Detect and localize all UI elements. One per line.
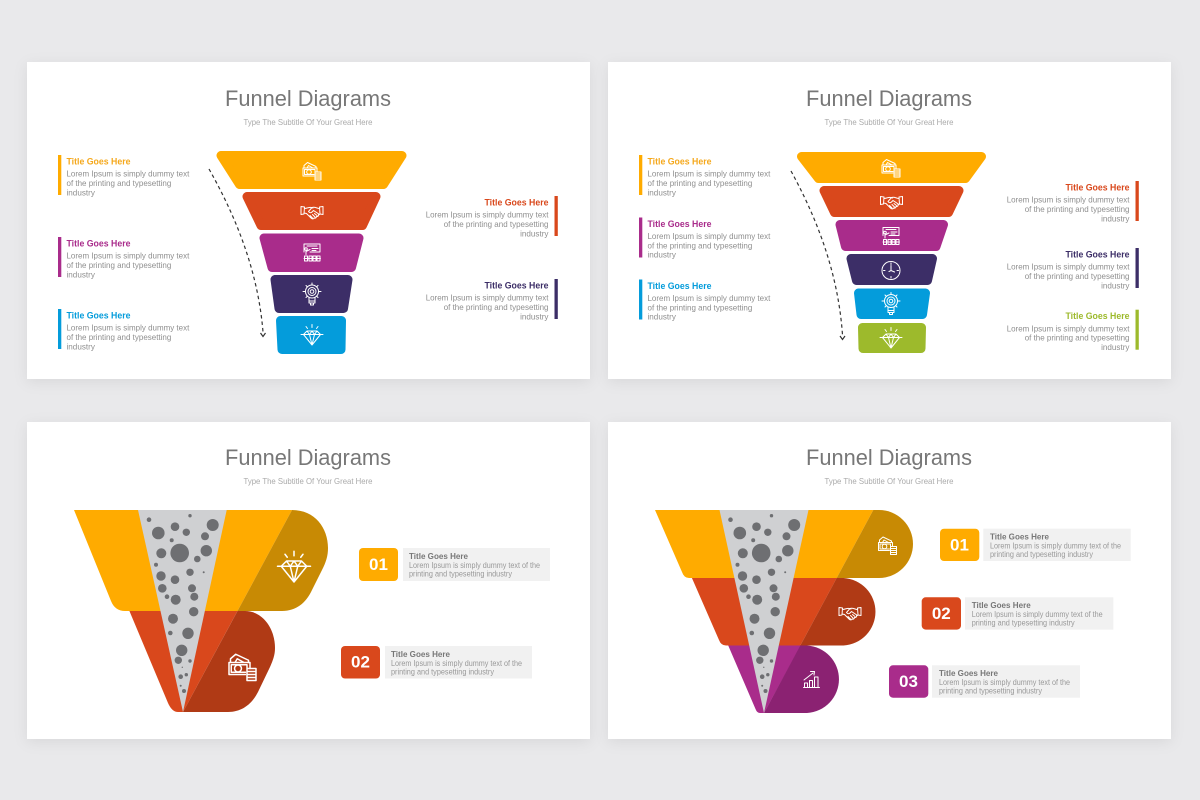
title: Funnel Diagrams <box>806 86 972 111</box>
funnel band: yellow <box>655 510 873 578</box>
icon: billboard <box>883 228 900 244</box>
subtitle: Type The Subtitle Of Your Great Here <box>824 476 954 486</box>
text block 1: industry <box>66 187 96 197</box>
text block 4 <box>426 279 558 321</box>
text block 3: Title Goes Here <box>648 219 712 229</box>
callout 02: 02 <box>932 604 951 623</box>
icon: money <box>882 160 900 177</box>
text block 5: industry <box>66 341 96 351</box>
funnel band: yellow <box>74 510 292 611</box>
icon: money <box>878 537 896 554</box>
text block 3: of the printing and typesetting <box>648 240 753 250</box>
icon: money <box>229 654 256 680</box>
text block 4: Lorem Ipsum is simply dummy text <box>1007 262 1130 272</box>
callout 02 <box>922 597 1113 630</box>
text block 2: of the printing and typesetting <box>1025 204 1130 214</box>
text block 1 <box>639 155 771 197</box>
text block 5: Lorem Ipsum is simply dummy text <box>66 323 190 333</box>
icon: handshake <box>301 206 323 219</box>
arrow: dashed flow <box>791 171 845 340</box>
text block 6 <box>1007 310 1139 352</box>
icon: chart <box>804 672 820 688</box>
panel: six-step funnel <box>608 62 1171 379</box>
icon: bulb <box>882 292 900 314</box>
text block 4: of the printing and typesetting <box>444 302 549 312</box>
text block 2 <box>1007 181 1139 223</box>
title: Funnel Diagrams <box>225 86 391 111</box>
funnel layer 4 <box>851 258 932 280</box>
callout 03: 03 <box>899 672 918 691</box>
callout 01: Lorem Ipsum is simply dummy text of the <box>990 541 1121 550</box>
text block 6: of the printing and typesetting <box>1025 333 1130 343</box>
text block 5: industry <box>648 312 677 322</box>
callout 02: Title Goes Here <box>391 649 450 659</box>
subtitle: Type The Subtitle Of Your Great Here <box>244 117 373 127</box>
panel: five-step funnel <box>27 62 590 379</box>
subtitle: Type The Subtitle Of Your Great Here <box>824 117 954 127</box>
text block 3 <box>639 218 771 260</box>
funnel layer 2 <box>824 190 959 212</box>
panel: two-step wedge funnel <box>27 422 590 739</box>
text block 4: Title Goes Here <box>1066 249 1130 259</box>
funnel layer 4 <box>275 280 348 308</box>
funnel layer 5 <box>858 293 926 314</box>
funnel band: red <box>129 610 238 712</box>
text block 3: of the printing and typesetting <box>66 260 172 270</box>
callout 03 <box>889 665 1080 698</box>
text block 2: Lorem Ipsum is simply dummy text <box>1007 195 1130 205</box>
callout 01: 01 <box>369 555 388 574</box>
text block 4: Title Goes Here <box>484 280 548 290</box>
funnel band: purple <box>728 645 801 713</box>
text block 3 <box>58 237 190 279</box>
text block 2: of the printing and typesetting <box>444 219 549 229</box>
text block 1: Title Goes Here <box>66 157 130 167</box>
text block 3: Lorem Ipsum is simply dummy text <box>66 251 190 261</box>
text block 5 <box>58 309 190 351</box>
funnel band: red <box>692 578 837 646</box>
callout 03: Lorem Ipsum is simply dummy text of the <box>939 678 1070 687</box>
icon: diamond <box>301 324 323 345</box>
panel: three-step wedge funnel <box>608 422 1171 739</box>
callout 02: Lorem Ipsum is simply dummy text of the <box>972 610 1103 619</box>
callout 02: Title Goes Here <box>972 600 1031 610</box>
text block 1: industry <box>648 187 677 197</box>
funnel layer 2 <box>247 196 376 226</box>
callout 01: printing and typesetting industry <box>409 570 512 578</box>
text block 1: Lorem Ipsum is simply dummy text <box>66 169 190 179</box>
funnel tab: dark red <box>800 578 875 646</box>
grey wedge with dots <box>138 510 227 712</box>
funnel layer 3 <box>264 238 359 268</box>
funnel tab: dark purple <box>764 646 839 713</box>
text block 2: industry <box>520 228 549 238</box>
callout 02: printing and typesetting industry <box>391 668 494 676</box>
icon: bulb <box>303 283 321 305</box>
icon: handshake <box>880 196 902 209</box>
text block 5: Lorem Ipsum is simply dummy text <box>648 293 771 303</box>
text block 4: industry <box>520 311 549 321</box>
text block 5: Title Goes Here <box>66 311 130 321</box>
text block 1: Title Goes Here <box>648 157 712 167</box>
text block 5 <box>639 280 771 322</box>
callout 01: Title Goes Here <box>409 551 468 561</box>
funnel layer 1 <box>221 156 402 184</box>
callout 01: 01 <box>950 536 969 554</box>
text block 2: Title Goes Here <box>1066 182 1130 192</box>
callout 01: Lorem Ipsum is simply dummy text of the <box>409 561 540 570</box>
funnel tab: dark yellow <box>837 510 913 578</box>
text block 4 <box>1007 248 1139 290</box>
text block 6: industry <box>1101 342 1130 352</box>
arrow: dashed flow <box>209 169 266 336</box>
icon: diamond <box>880 328 902 348</box>
text block 3: Lorem Ipsum is simply dummy text <box>648 231 771 241</box>
text block 6: Lorem Ipsum is simply dummy text <box>1007 323 1130 333</box>
callout 02: printing and typesetting industry <box>972 618 1075 627</box>
text block 4: industry <box>1101 280 1130 290</box>
text block 5: Title Goes Here <box>648 281 712 291</box>
funnel layer 1 <box>802 156 982 178</box>
text block 1: of the printing and typesetting <box>648 178 753 188</box>
text block 1: of the printing and typesetting <box>66 178 172 188</box>
text block 4: of the printing and typesetting <box>1025 271 1130 281</box>
subtitle: Type The Subtitle Of Your Great Here <box>244 476 373 486</box>
funnel tab: dark yellow <box>238 510 328 611</box>
title: Funnel Diagrams <box>806 445 972 470</box>
callout 02 <box>341 646 532 678</box>
text block 3: industry <box>66 269 96 279</box>
callout 03: printing and typesetting industry <box>939 686 1042 696</box>
text block 1 <box>58 155 190 197</box>
text block 3: Title Goes Here <box>66 239 130 249</box>
title: Funnel Diagrams <box>225 445 391 470</box>
text block 6: Title Goes Here <box>1066 311 1130 321</box>
icon: handshake <box>839 608 861 620</box>
funnel layer 6 <box>862 328 922 348</box>
funnel layer 3 <box>840 224 944 246</box>
icon: diamond <box>278 551 310 582</box>
text block 5: of the printing and typesetting <box>66 332 172 342</box>
text block 4: Lorem Ipsum is simply dummy text <box>426 293 549 303</box>
funnel layer 5 <box>280 320 342 350</box>
text block 2 <box>426 196 558 238</box>
callout 01 <box>940 529 1131 561</box>
callout 03: Title Goes Here <box>939 668 998 678</box>
text block 2: industry <box>1101 213 1130 223</box>
text block 3: industry <box>648 250 677 260</box>
icon: billboard <box>304 244 320 261</box>
callout 01: printing and typesetting industry <box>990 550 1093 559</box>
grey wedge with dots <box>720 510 808 713</box>
callout 02: Lorem Ipsum is simply dummy text of the <box>391 659 522 668</box>
icon: clock <box>882 262 900 280</box>
callout 02: 02 <box>351 652 370 672</box>
text block 5: of the printing and typesetting <box>648 302 753 312</box>
icon: money <box>303 162 321 180</box>
text block 2: Lorem Ipsum is simply dummy text <box>426 210 549 220</box>
text block 2: Title Goes Here <box>484 197 548 207</box>
callout 01: Title Goes Here <box>990 532 1049 542</box>
text block 1: Lorem Ipsum is simply dummy text <box>648 169 771 179</box>
callout 01 <box>359 548 550 581</box>
funnel tab: dark red <box>183 611 275 712</box>
